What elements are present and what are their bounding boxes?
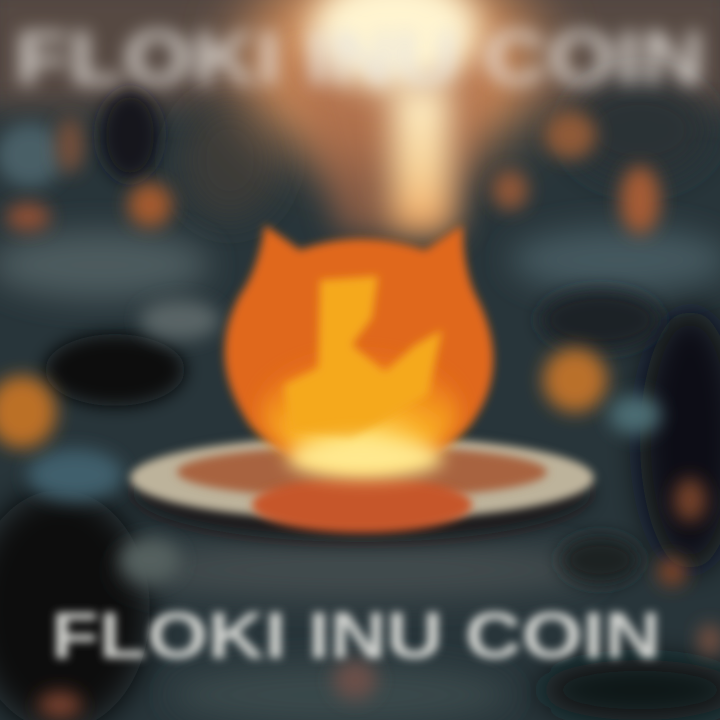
title: top: FLOKI INU COIN: [15, 16, 705, 101]
orange Floki coin with ears: [225, 225, 493, 478]
light beam from above: [240, 0, 540, 235]
plate under the coin: [130, 436, 594, 542]
title: bottom: FLOKI INU COIN: [51, 598, 661, 672]
